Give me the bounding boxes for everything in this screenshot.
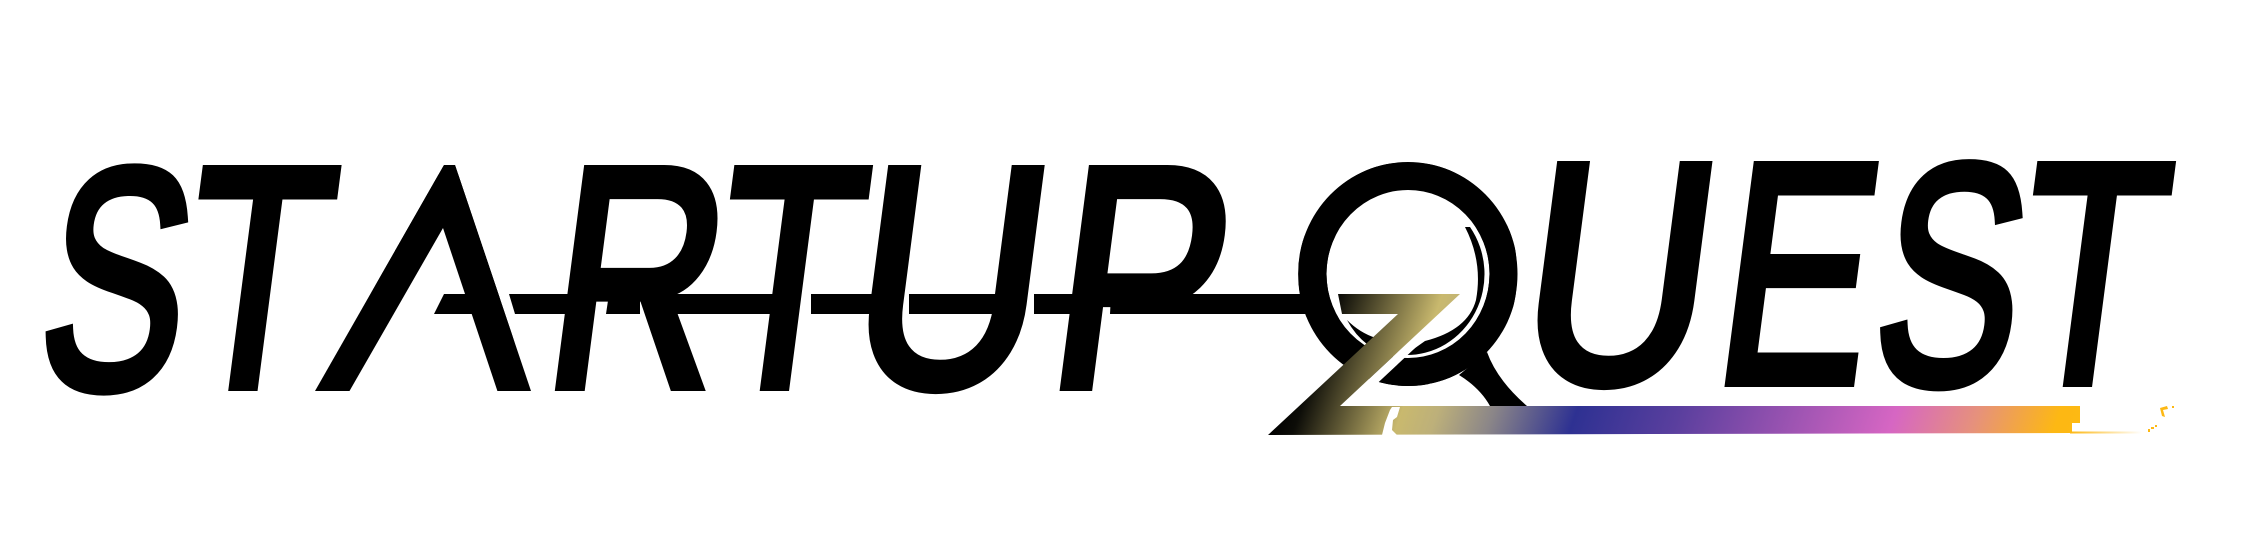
gap beside the Z diagonal [1340,294,1473,406]
letter A [315,165,531,391]
letter E: E [1702,100,1897,451]
letter T: T [164,104,351,455]
crossbar line running through the letters [509,294,1310,314]
letter S: S [1859,101,2047,452]
letter T: T [695,104,882,455]
letter R: R [531,104,747,455]
letter A: A [309,108,566,459]
letter S: S [24,106,212,456]
letter P: P [1035,104,1251,455]
logo: STARTUP QUEST wordmark [46,159,2176,435]
letter Q [1298,162,1527,406]
gradient Z with long underline bar [1268,294,2142,435]
letter Q: Q [1284,100,1531,451]
letter U: U [1504,100,1736,451]
orange specks at the end of the underline [2148,406,2174,432]
letter U: U [835,104,1068,455]
letter T: T [1998,100,2185,451]
